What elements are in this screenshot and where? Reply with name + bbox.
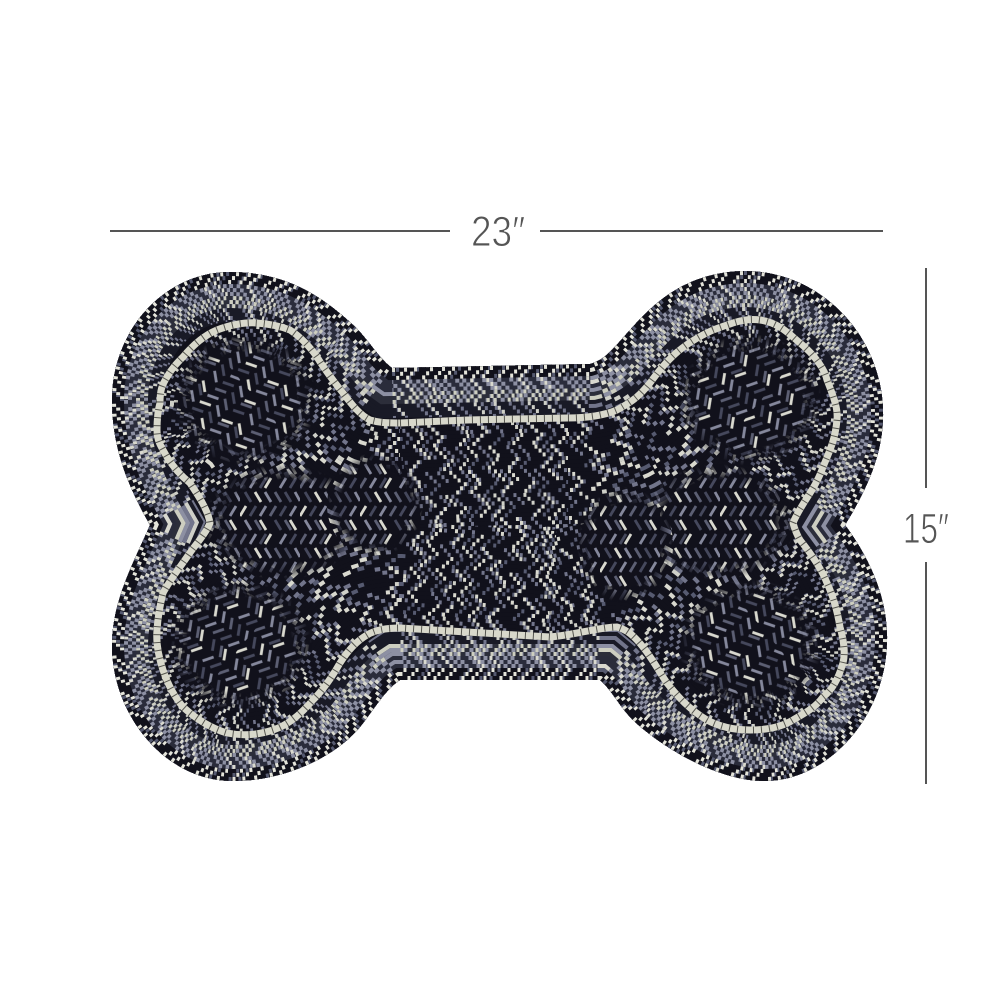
bone-shaped braided rug — [100, 260, 900, 790]
rug border rings — [100, 260, 900, 790]
width line right — [540, 230, 883, 232]
white inner braid — [157, 319, 844, 735]
rug centre weave rings — [160, 323, 841, 732]
height line bottom — [925, 562, 927, 784]
width label: 23″ — [471, 208, 525, 256]
height line top — [925, 268, 927, 488]
width line left — [110, 230, 450, 232]
height label: 15″ — [903, 504, 949, 552]
lobe and waist herringbone patches — [169, 334, 821, 710]
